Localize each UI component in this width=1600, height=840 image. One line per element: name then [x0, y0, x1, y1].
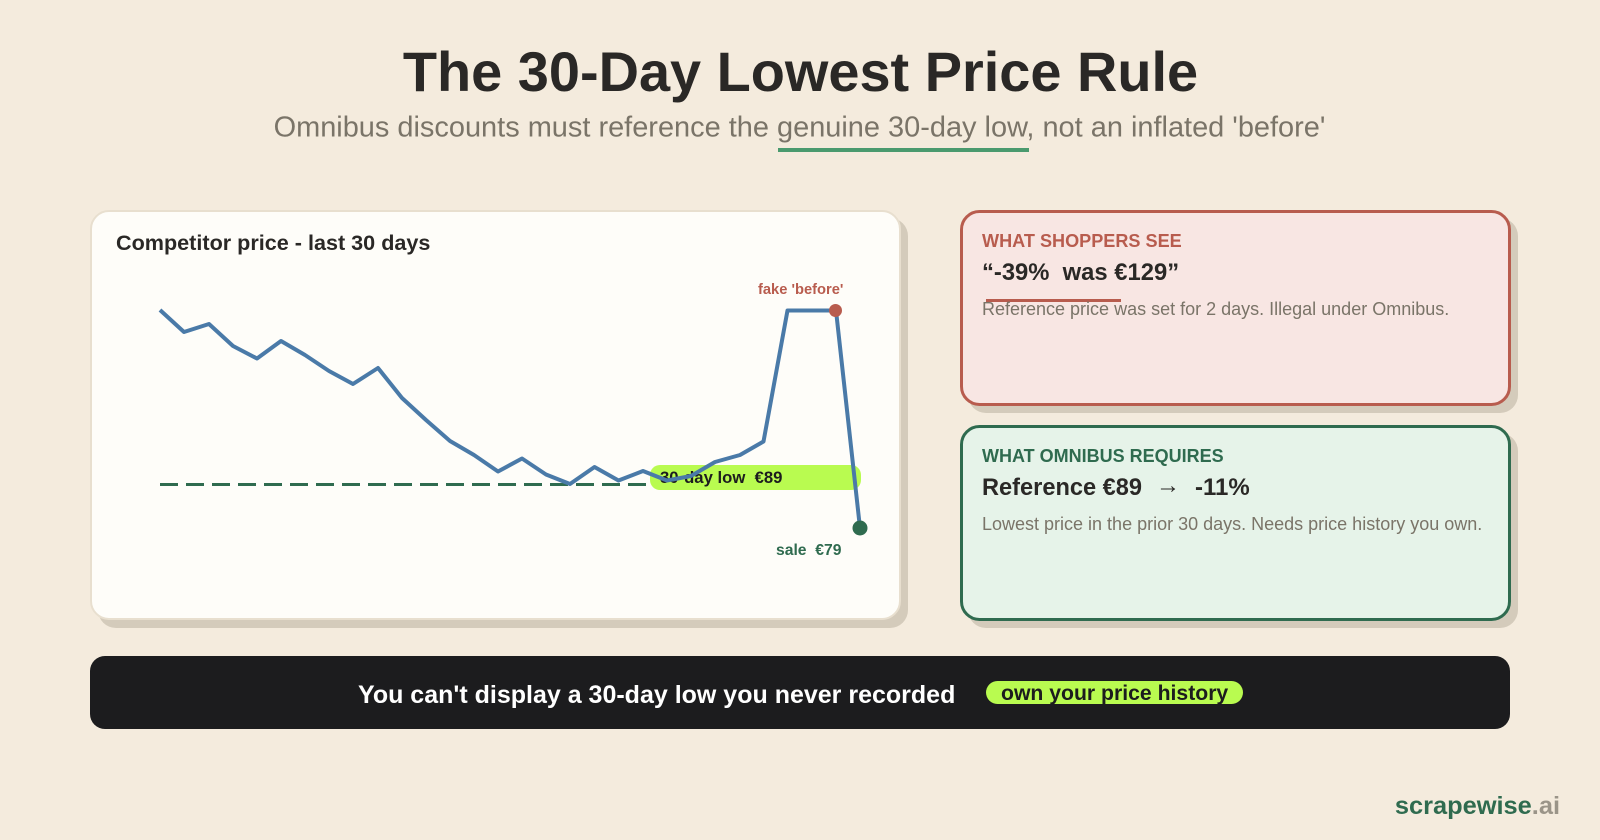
strike line: [986, 299, 1121, 302]
chart heading: Competitor price - last 30 days: [116, 230, 430, 255]
banner pill: own your price history: [1001, 682, 1228, 705]
30-day low dashed line: [160, 483, 860, 486]
omnibus heading: WHAT OMNIBUS REQUIRES: [982, 446, 1224, 466]
omnibus reference: Reference €89: [982, 475, 1142, 501]
brand wordmark: scrapewise.ai: [1395, 792, 1560, 820]
title: The 30-Day Lowest Price Rule: [403, 40, 1198, 103]
banner: [90, 656, 1510, 729]
panel: competitor price chart: [91, 211, 908, 628]
omnibus reference: -11%: [1195, 474, 1250, 501]
shoppers heading: WHAT SHOPPERS SEE: [982, 231, 1182, 251]
panel: what shoppers see: [962, 212, 1518, 413]
omnibus reference: →: [1156, 472, 1180, 499]
marker: fake before: [758, 282, 843, 317]
subtitle: Omnibus discounts must reference the genuine 30-day low, not an inflated 'before': [274, 112, 1325, 144]
shoppers description: Reference price was set for 2 days. Illegal under Omnibus.: [982, 299, 1449, 319]
label: 30-day low: 30-day low €89: [660, 468, 782, 487]
price line: [160, 310, 860, 528]
marker: sale price: [776, 520, 868, 559]
label: 30-day low: [650, 465, 861, 490]
shoppers claim: “-39% was €129”: [982, 259, 1179, 286]
marker: fake before: fake 'before': [758, 282, 843, 298]
omnibus reference: [982, 472, 1250, 501]
panel: what omnibus requires: [962, 426, 1518, 628]
omnibus description: Lowest price in the prior 30 days. Needs price history you own.: [982, 514, 1482, 534]
marker: sale price: sale €79: [776, 542, 842, 559]
banner text: You can't display a 30-day low you never recorded: [358, 681, 955, 709]
